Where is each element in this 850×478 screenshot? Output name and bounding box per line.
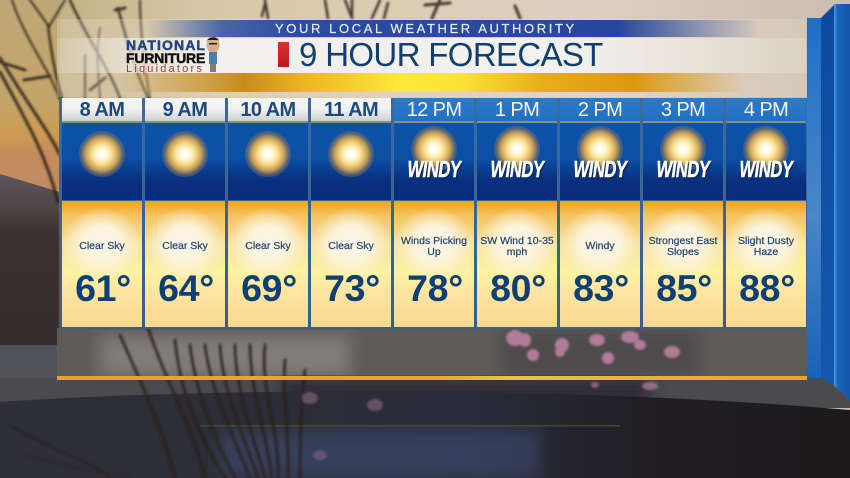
column: 2 PM: 2 PM [578,99,622,121]
column: 12 PM [394,98,474,327]
column: 1 PM [477,98,557,327]
sponsor logo: National Furniture Liquidators: FURNITURE [126,50,205,66]
column: 10 AM: 10 AM [240,99,296,121]
header panel [57,19,806,97]
sponsor logo: National Furniture Liquidators [126,37,220,75]
column: 9 AM: 9 AM [163,99,207,121]
icon: cartoon man [206,37,220,72]
column: 11 AM [311,98,391,327]
column: 11 AM: Clear Sky [328,240,374,252]
column: 4 PM [726,98,806,327]
column: 8 AM: Clear Sky [79,240,125,252]
column: 2 PM [560,98,640,327]
column: 12 PM: 12 PM [407,99,461,121]
column: 10 AM [228,98,308,327]
column: 4 PM: 88° [739,267,795,309]
column: 11 AM: 73° [324,267,380,309]
blue pillars at right [807,4,850,400]
column: 2 PM: WINDY [574,157,626,183]
column: 12 PM: 78° [407,267,463,309]
column: 12 PM: Winds Picking Up [401,234,467,258]
column: 3 PM: WINDY [656,157,710,183]
column: 11 AM: 11 AM [324,99,378,121]
column: 2 PM: Windy [585,240,615,252]
column: 3 PM [643,98,723,327]
column: 10 AM: Clear Sky [245,240,291,252]
title: 9 HOUR FORECAST [299,36,603,73]
sponsor logo: National Furniture Liquidators: Liquidators [126,63,204,75]
column: 9 AM: 64° [158,267,214,309]
gold rule under forecast [57,376,807,380]
column: 4 PM: WINDY [740,157,792,183]
column: 4 PM: Slight Dusty Haze [738,234,794,258]
column: 8 AM [62,98,142,327]
column: 12 PM: WINDY [408,157,460,183]
column: 9 AM: Clear Sky [162,240,208,252]
tagline band: YOUR LOCAL WEATHER AUTHORITY [275,21,577,36]
gold band [57,73,806,92]
column: 2 PM: 83° [573,267,629,309]
column: 8 AM: 8 AM [80,99,124,121]
column: 1 PM: 1 PM [495,99,539,121]
column: 10 AM: 69° [241,267,297,309]
tagline band [57,20,806,37]
column: 1 PM: 80° [490,267,546,309]
column: 9 AM [145,98,225,327]
column: 1 PM: SW Wind 10-35 mph [480,234,554,258]
sponsor logo: National Furniture Liquidators: NATIONAL [126,37,206,53]
column: 3 PM: 85° [656,267,712,309]
column: 3 PM: Strongest East Slopes [649,234,717,258]
title band [57,38,806,73]
column dividers backing [59,98,807,329]
column: 4 PM: 4 PM [744,99,788,121]
column: 3 PM: 3 PM [661,99,705,121]
column: 8 AM: 61° [75,267,131,309]
column: 1 PM: WINDY [490,157,544,183]
title accent bar [278,42,289,67]
